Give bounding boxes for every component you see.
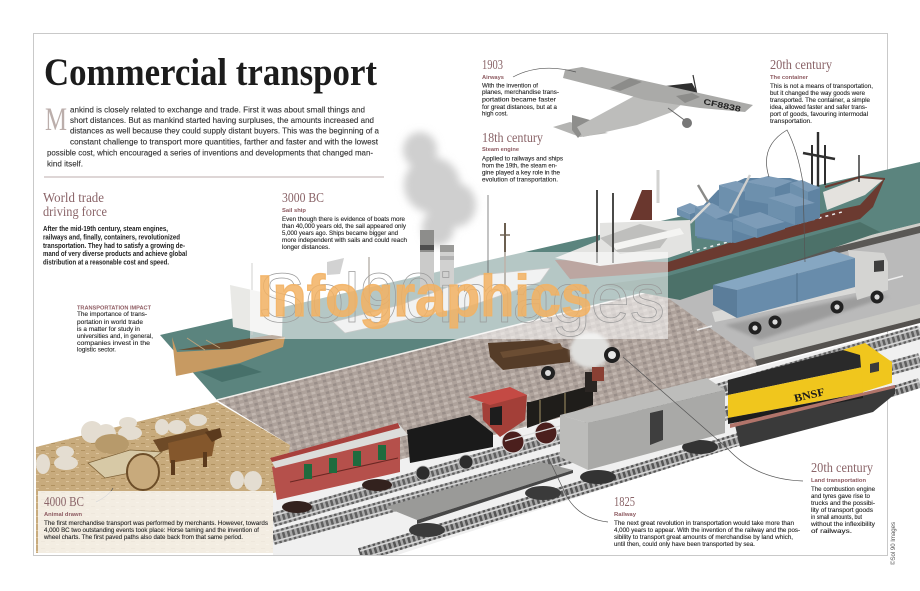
text block: 1825 railway: 1825: [614, 495, 635, 510]
panel: 4000 BC translucent caption: 4000 BC: [44, 495, 84, 510]
text block: transportation impact: TRANSPORTATION IMPACT: [77, 306, 151, 312]
panel: 4000 BC translucent caption: Animal drawn: [44, 512, 82, 518]
icon: horse wagon: [488, 340, 570, 380]
leader lines: [96, 68, 805, 522]
text block: 20th century the container: This is not a means of transportation,: [770, 83, 873, 90]
text block: introduction: [45, 102, 379, 168]
text block: 1825 railway: sibility to transport great amounts of merchandise by land which,: [614, 534, 793, 541]
text block: 20th century the container: port of goods, favouring intermodal: [770, 111, 869, 118]
panel: 4000 BC translucent caption: The first merchandise transport was performed by merchants. However, towards: [44, 520, 269, 527]
icon: BNSF diesel locomotive: [728, 343, 895, 447]
panel: railway tracks: [273, 320, 920, 560]
text block: 3000 BC sail ship: 3000 BC: [282, 191, 324, 206]
text block: world trade driving force: After the mid-19th century, steam engines,: [43, 226, 168, 233]
text block: 1903 airways: With the invention of: [482, 82, 538, 89]
title: Commercial transport: [44, 51, 377, 94]
quay edge line: [217, 287, 668, 400]
text block: transportation impact: The importance of trans-: [77, 311, 147, 318]
panel: sand ground: [36, 402, 290, 553]
text block: introduction: possible cost, which encouraged a series of inventions and developments that changed man-: [47, 148, 373, 158]
text block: 3000 BC sail ship: more independent with sails and could reach: [282, 237, 407, 244]
text block: 1903 airways: portation became faster: [482, 96, 557, 103]
text block: 3000 BC sail ship: Even though there is evidence of boats more: [282, 216, 405, 223]
icon: flat car: [385, 462, 573, 537]
text block: 3000 BC sail ship: Sail ship: [282, 208, 306, 214]
icon: box car: [560, 378, 725, 484]
text block: world trade driving force: railways and, finally, containers, revolutionized: [43, 234, 180, 242]
text block: 20th century land transportation: of railways.: [811, 528, 852, 535]
panel: sea band: [160, 162, 920, 400]
text block: world trade driving force: distribution at a reasonable cost and speed.: [43, 260, 169, 266]
text block: 20th century the container: transportation.: [770, 118, 812, 125]
text block: 18th century steam engine: evolution of transportation.: [482, 176, 558, 183]
drop cap: M: [45, 102, 67, 138]
text block: introduction: kind itself.: [47, 158, 83, 168]
text block: world trade driving force: transportation. They had to satisfy a growing de-: [43, 243, 186, 250]
text block: 1825 railway: until then, could only have been transported by sea.: [614, 541, 755, 548]
panel: 4000 BC translucent caption: [38, 491, 273, 553]
icon: steam locomotive: [468, 367, 604, 453]
text block: 1903 airways: [482, 58, 559, 118]
icon: coal tender: [407, 415, 493, 480]
text block: 1903 airways: 1903: [482, 58, 503, 73]
text block: 20th century the container: [770, 58, 873, 125]
text block: 1903 airways: planes, merchandise trans-: [482, 89, 559, 96]
icon: BNSF diesel locomotive: BNSF: [793, 386, 826, 405]
icon: steam puff and wagon wheel: [570, 332, 620, 368]
icon: airplane: CF8838: [703, 97, 742, 114]
panel: road: [668, 223, 920, 366]
text block: 20th century land transportation: in small amounts, but: [811, 514, 862, 521]
text block: introduction: ankind is closely related to exchange and trade. First it was about small things and: [70, 104, 365, 114]
text block: 18th century steam engine: Steam engine: [482, 147, 520, 153]
text block: world trade driving force: World trade: [43, 191, 104, 206]
text block: world trade driving force: driving force: [43, 205, 107, 220]
text block: 20th century the container: The container: [770, 75, 809, 81]
icon: steam ship: [327, 223, 550, 333]
text block: transportation impact: companies invest in the: [77, 340, 150, 347]
panel: 4000 BC translucent caption: 4,000 BC two outstanding events took place: Horse taming and the invention of: [44, 527, 259, 534]
text block: 20th century land transportation: without the inflexibility: [810, 521, 876, 528]
text block: 1903 airways: for great distances, but at a: [482, 104, 557, 111]
watermark overlay: [250, 252, 668, 339]
text block: introduction: distances as well because they could supply distant buyers. This was the beginning of a: [70, 126, 379, 136]
text block: 3000 BC sail ship: than 40,000 years old, the sail appeared only: [282, 223, 407, 230]
text block: world trade driving force: mand of very diverse products and achieve global: [43, 251, 187, 258]
icon: sailing boat: [172, 263, 285, 382]
text block: 1903 airways: high cost.: [482, 111, 508, 118]
text block: 20th century land transportation: and tyres gave rise to: [811, 493, 870, 500]
text block: transportation impact: is a matter for study in: [77, 326, 140, 333]
text block: 18th century steam engine: gine played a key role in the: [482, 170, 560, 177]
text block: 20th century the container: idea, allowed faster and safer trans-: [770, 104, 867, 111]
panel: 4000 BC translucent caption: wheel charts. The first paved paths also date back from that same period.: [43, 534, 243, 541]
text block: 20th century land transportation: Land transportation: [811, 478, 866, 484]
text block: world trade driving force: [43, 191, 187, 266]
text block: 3000 BC sail ship: [282, 191, 407, 251]
credit: ©Sol 90 Images: [889, 522, 897, 565]
text block: transportation impact: portation in world trade: [77, 319, 143, 326]
icon: smoke cloud: [403, 132, 476, 246]
text block: 3000 BC sail ship: longer distances.: [282, 244, 330, 251]
text block: 1825 railway: [614, 495, 800, 548]
text block: 20th century land transportation: lity of transport goods: [811, 507, 874, 514]
text block: 20th century the container: 20th century: [770, 58, 832, 73]
text block: 1825 railway: 4,000 years to appear. With the invention of the railway and the pos-: [614, 527, 800, 534]
text block: 1825 railway: Railway: [614, 512, 637, 518]
text block: 20th century land transportation: trucks and the possibi-: [811, 500, 875, 507]
text block: introduction: short distances. But as mankind started having surpluses, the amounts increased and: [70, 115, 374, 125]
text block: transportation impact: universities and, in general,: [77, 333, 153, 340]
icon: cargo ship: [555, 132, 885, 300]
text block: 20th century land transportation: [810, 461, 876, 535]
icon: airplane: [553, 67, 753, 138]
text block: 1903 airways: Airways: [482, 75, 504, 81]
text block: 3000 BC sail ship: 5,000 years ago. Ships became bigger and: [282, 230, 398, 237]
text block: transportation impact: [77, 306, 153, 354]
icon: container truck: [712, 250, 890, 340]
watermark: Sol90images: [258, 259, 665, 337]
panel: paved quay: [217, 287, 757, 493]
text block: 18th century steam engine: 18th century: [482, 131, 543, 146]
text block: 20th century the container: transported. The container, a simple: [770, 97, 870, 104]
text block: 18th century steam engine: from the 19th, the steam en-: [482, 162, 557, 169]
text block: 1825 railway: The next great revolution in transportation would take more than: [614, 520, 794, 527]
icon: passenger car: [270, 423, 408, 513]
watermark: Infographics: [257, 264, 592, 329]
text block: 20th century the container: but it changed the way goods were: [770, 90, 865, 97]
text block: 18th century steam engine: Applied to railways and ships: [482, 156, 564, 163]
text block: introduction: constant challenge to transport more quantities, farther and faster and with the lowest: [70, 137, 379, 147]
text block: 20th century land transportation: 20th century: [811, 461, 873, 476]
icon: ox cart with oxen: [36, 414, 262, 491]
text block: 18th century steam engine: [482, 131, 564, 183]
text block: 20th century land transportation: The combustion engine: [811, 486, 875, 493]
text block: transportation impact: logistic sector.: [77, 346, 116, 354]
